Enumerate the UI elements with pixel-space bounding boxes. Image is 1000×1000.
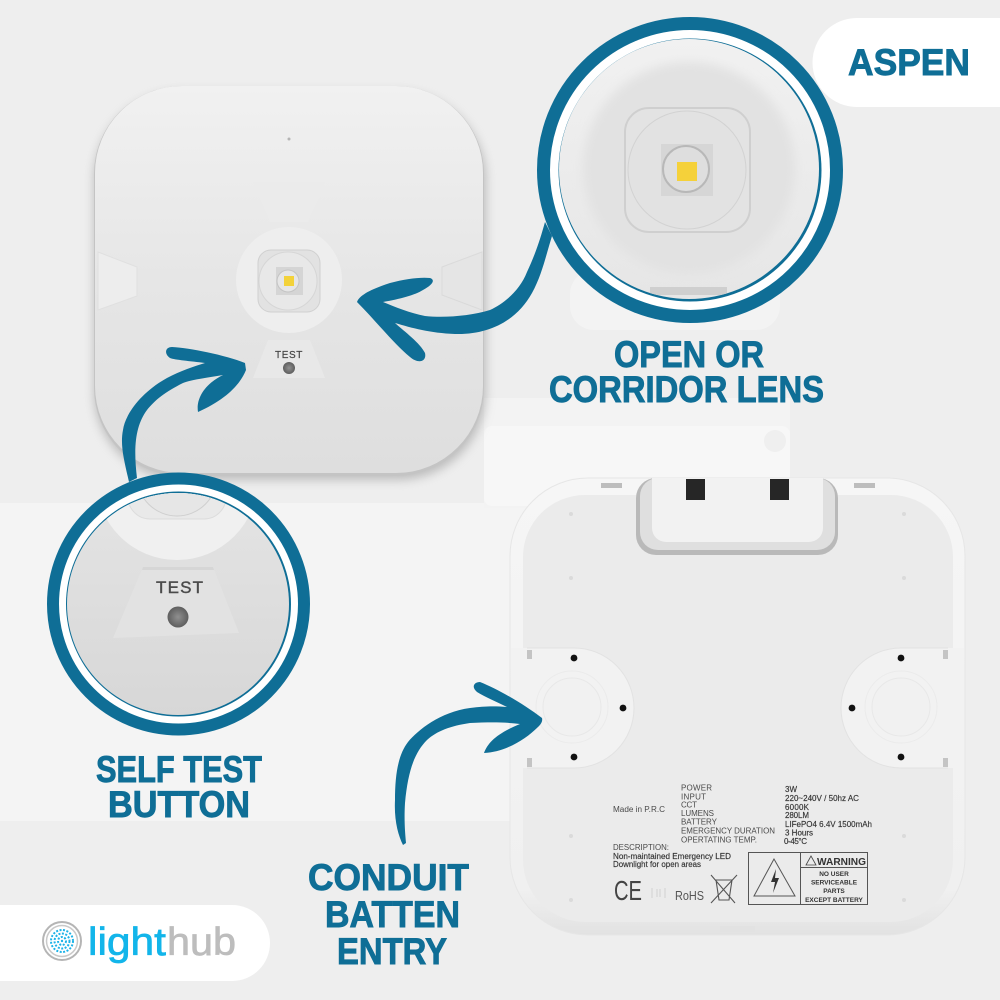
badge: ASPEN: ASPEN bbox=[848, 42, 970, 83]
warning box: PARTS bbox=[823, 888, 845, 895]
rating label text: INPUT bbox=[681, 792, 706, 802]
warning box: NO USER bbox=[819, 871, 849, 878]
rating label text: 3 Hours bbox=[785, 828, 813, 838]
rating label text: 220~240V / 50hz AC bbox=[785, 794, 859, 803]
heading: self test button: BUTTON bbox=[108, 784, 250, 825]
front test label: TEST bbox=[275, 350, 303, 361]
heading: self test button: SELF TEST bbox=[96, 749, 262, 790]
rating label text: CCT bbox=[681, 800, 697, 810]
warning box: SERVICEABLE bbox=[811, 880, 858, 886]
warning box: WARNING bbox=[817, 856, 866, 868]
rating label text: 280LM bbox=[785, 811, 809, 820]
rating label text: DESCRIPTION: bbox=[613, 843, 669, 852]
logo icon bbox=[43, 922, 81, 960]
arrow: lens bbox=[357, 222, 552, 361]
rating label text: Non-maintained Emergency LED bbox=[613, 852, 731, 861]
heading: conduit batten entry bbox=[308, 857, 469, 972]
heading: conduit batten entry: BATTEN bbox=[325, 894, 460, 935]
panel: back of light bbox=[510, 478, 965, 935]
rating label text: OPERTATING TEMP. bbox=[681, 836, 757, 844]
left conduit entry bbox=[511, 648, 634, 768]
rating label text: 6000K bbox=[785, 803, 810, 812]
rating label text: 0-45°C bbox=[784, 837, 807, 846]
warning box: EXCEPT BATTERY bbox=[805, 897, 864, 904]
rating label text: Downlight for open areas bbox=[613, 860, 701, 869]
badge: ASPEN bbox=[812, 18, 1000, 107]
rating label text: LIFePO4 6.4V 1500mAh bbox=[785, 820, 872, 829]
rating label text: 3W bbox=[785, 785, 797, 794]
certification marks bbox=[614, 875, 737, 906]
front lens bbox=[236, 227, 342, 333]
rating label text: POWER bbox=[681, 784, 712, 792]
certification marks: RoHS bbox=[675, 889, 704, 903]
callout: test button magnifier: TEST bbox=[156, 578, 204, 597]
heading: conduit batten entry: CONDUIT bbox=[308, 857, 469, 898]
rating label text: EMERGENCY DURATION bbox=[681, 826, 775, 836]
right conduit entry bbox=[841, 648, 964, 768]
logo: lighthub: light bbox=[88, 921, 166, 964]
heading: self test button bbox=[96, 749, 262, 825]
heading: conduit batten entry: ENTRY bbox=[337, 931, 447, 972]
logo: lighthub bbox=[0, 905, 270, 981]
arrow: conduit entry bbox=[395, 682, 542, 845]
heading: open or corridor lens: OPEN OR bbox=[614, 334, 764, 375]
rating label text bbox=[613, 784, 872, 869]
rating label text: BATTERY bbox=[681, 818, 718, 826]
warning box bbox=[748, 852, 868, 904]
callout: lens magnifier bbox=[544, 24, 836, 316]
logo: lighthub: hub bbox=[167, 921, 236, 964]
heading: open or corridor lens bbox=[549, 334, 824, 410]
front test button bbox=[283, 362, 295, 374]
rating label text: Made in P.R.C bbox=[613, 805, 665, 814]
callout: test button magnifier bbox=[47, 472, 310, 736]
panel: front of light bbox=[94, 86, 486, 480]
arrow: self test button bbox=[122, 347, 246, 482]
certification marks: CE bbox=[614, 875, 642, 906]
rating label text: LUMENS bbox=[681, 809, 714, 818]
heading: open or corridor lens: CORRIDOR LENS bbox=[549, 369, 824, 410]
